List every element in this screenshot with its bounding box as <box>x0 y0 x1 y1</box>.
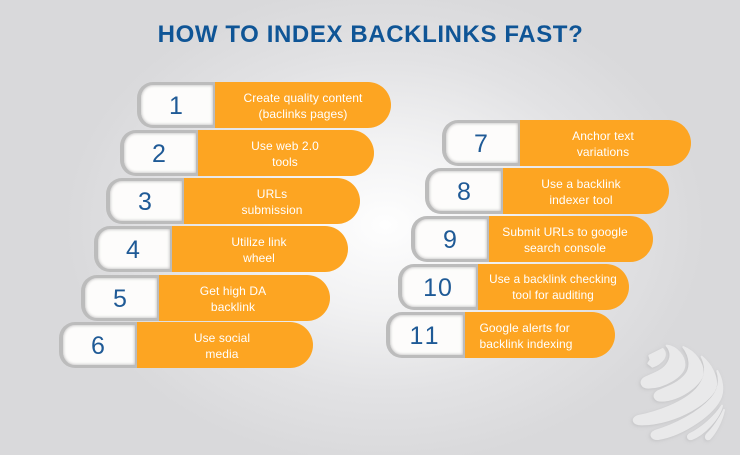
step 11: backlink indexing <box>479 337 573 351</box>
step 6: Use social <box>194 331 250 345</box>
step 9 <box>411 216 653 262</box>
step 1: (baclinks pages) <box>258 107 347 121</box>
step 6 <box>59 322 313 368</box>
step 10: Use a backlink checking <box>489 273 617 286</box>
step 2: tools <box>272 155 298 169</box>
step 8: 8 <box>457 178 471 206</box>
step 6: media <box>205 347 239 361</box>
step 9: search console <box>524 241 606 255</box>
title: HOW TO INDEX BACKLINKS FAST? <box>158 21 583 48</box>
step 2: 2 <box>152 140 166 168</box>
step 1 <box>137 82 391 128</box>
step 4: Utilize link <box>231 235 287 249</box>
step 3 <box>106 178 360 224</box>
step 5: backlink <box>211 300 255 314</box>
step 7: 7 <box>474 130 488 158</box>
step 8 <box>425 168 669 214</box>
step 8: indexer tool <box>549 193 613 207</box>
step 10: tool for auditing <box>512 289 594 302</box>
step 1: 1 <box>169 92 183 120</box>
icon: globe watermark <box>632 344 725 442</box>
step 3: submission <box>241 203 303 217</box>
step 4 <box>94 226 348 272</box>
step 7: Anchor text <box>572 129 634 143</box>
step 11: 11 <box>410 322 441 350</box>
step 7: variations <box>577 145 629 159</box>
step 11: Google alerts for <box>479 321 570 335</box>
step 11 <box>386 312 615 358</box>
step 1: Create quality content <box>244 91 362 105</box>
step 7 <box>442 120 691 166</box>
step 9: 9 <box>443 226 457 254</box>
step 5 <box>81 275 330 321</box>
step 8: Use a backlink <box>541 177 621 191</box>
step 5: Get high DA <box>200 284 266 298</box>
step 3: 3 <box>138 188 152 216</box>
step 6: 6 <box>91 332 105 360</box>
step 4: 4 <box>126 236 140 264</box>
step 10: 10 <box>423 274 453 302</box>
step 2: Use web 2.0 <box>251 139 319 153</box>
step 10 <box>398 264 629 310</box>
step 9: Submit URLs to google <box>502 225 628 239</box>
step 4: wheel <box>243 251 275 265</box>
step 2 <box>120 130 374 176</box>
step 5: 5 <box>113 285 127 313</box>
step 3: URLs <box>257 187 287 201</box>
